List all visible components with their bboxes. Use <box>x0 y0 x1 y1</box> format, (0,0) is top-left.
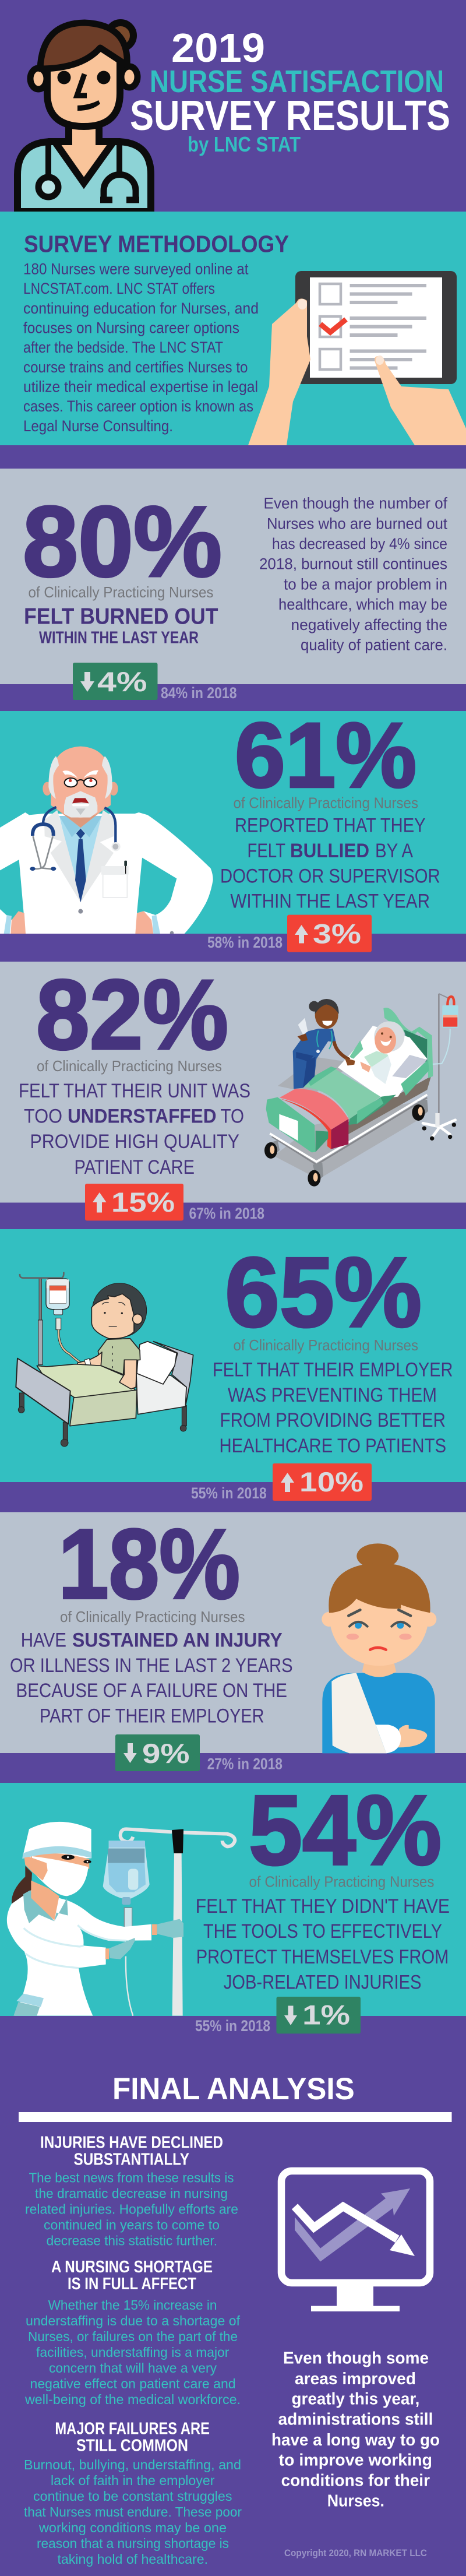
finding: understaffed: PROVIDE HIGH QUALITY <box>30 1131 239 1153</box>
finding: felt burned out: FELT BURNED OUT <box>24 604 218 629</box>
finding: understaffed: TO <box>220 1106 244 1128</box>
callout: closing statement: Nurses. <box>327 2492 384 2511</box>
finding: reported bullied: REPORTED THAT THEY <box>235 815 426 837</box>
label: of clinically practicing nurses: of Clinically Practicing Nurses <box>37 1057 222 1075</box>
text block: burnout commentary: negatively affecting the <box>291 616 447 634</box>
rule under heading <box>19 2112 452 2122</box>
finding: understaffed: UNDERSTAFFED <box>68 1106 217 1128</box>
text block: major failures: Burnout, bullying, understaffing, and <box>24 2457 241 2472</box>
text block: major failures: working conditions may be one <box>38 2520 227 2535</box>
finding: sustained an injury <box>10 1629 292 1727</box>
badge: up 10%: 10% <box>299 1466 363 1497</box>
illustration: injured nurse with sling <box>322 1543 436 1753</box>
note: 55% in 2018: 55% in 2018 <box>191 1484 267 1502</box>
icon: hands holding tablet checklist <box>248 271 466 445</box>
text block: nursing shortage: Nurses, or failures on the part of the <box>28 2329 238 2344</box>
statistic: 18%: 18% <box>58 1509 240 1620</box>
badge: down 9%: 9% <box>142 1738 190 1769</box>
finding: reported bullied: BY A <box>375 840 413 862</box>
subheading: injuries declined: SUBSTANTIALLY <box>73 2150 189 2169</box>
text block: methodology: utilize their medical expertise in legal <box>23 378 258 395</box>
finding: understaffed: FELT THAT THEIR UNIT WAS <box>19 1080 250 1102</box>
text block: burnout commentary: to be a major problem in <box>284 575 447 593</box>
panel: header <box>17 23 450 212</box>
subtitle: by LNC STAT: by LNC STAT <box>188 132 301 156</box>
finding: reported bullied <box>220 815 440 913</box>
illustration: patient in bed with IV <box>16 1272 193 1447</box>
text block: burnout commentary: healthcare, which may be <box>278 596 447 613</box>
text block: major failures: lack of faith in the employer <box>51 2473 215 2488</box>
badge: down 4%: 4% <box>97 666 147 697</box>
text block: burnout commentary: has decreased by 4% since <box>272 535 447 552</box>
statistic: 61%: 61% <box>235 704 416 807</box>
text block: injuries declined <box>25 2170 238 2248</box>
text block: burnout commentary: quality of patient care. <box>301 636 447 654</box>
illustration: nurse with patient in bed <box>264 994 458 1187</box>
note: 55% in 2018: 55% in 2018 <box>195 2017 270 2035</box>
statistic: 82%: 82% <box>36 959 228 1070</box>
text block: methodology: focuses on Nursing career options <box>23 319 239 336</box>
statistic: 80%: 80% <box>23 486 222 598</box>
panel: sustained injury <box>0 1509 466 1783</box>
badge: up 15% <box>85 1184 183 1220</box>
text block: methodology: cases. This career option is known as <box>23 397 253 415</box>
finding: sustained an injury: PART OF THEIR EMPLOYER <box>40 1705 264 1727</box>
text block: burnout commentary: 2018, burnout still continues <box>259 555 447 573</box>
panel: employer preventing care <box>0 1229 466 1512</box>
text block: major failures <box>24 2457 242 2567</box>
text block: injuries declined: continued in years to come to <box>44 2217 220 2232</box>
panel: felt burned out <box>0 469 466 711</box>
heading: final analysis: FINAL ANALYSIS <box>112 2072 355 2106</box>
badge: up 15%: 15% <box>111 1187 175 1217</box>
text block: major failures: reason that a nursing shortage is <box>37 2536 229 2551</box>
finding: sustained an injury: OR ILLNESS IN THE LAST 2 YEARS <box>10 1655 292 1677</box>
callout: closing statement <box>271 2349 440 2511</box>
text block: major failures: continue to be constant struggles <box>33 2489 232 2504</box>
title: 2019: 2019 <box>171 25 265 71</box>
text block: nursing shortage: concern that will have a very <box>49 2360 217 2376</box>
text block: injuries declined: decrease this statistic further. <box>47 2233 217 2248</box>
finding: sustained an injury: SUSTAINED AN INJURY <box>72 1629 283 1651</box>
statistic: 54%: 54% <box>249 1775 442 1886</box>
text block: burnout commentary: Even though the number of <box>263 495 448 512</box>
panel: no tools to protect <box>0 1775 466 2035</box>
text block: major failures: that Nurses must endure. These poor <box>24 2504 242 2519</box>
text block: methodology: after the bedside. The LNC STAT <box>23 339 223 356</box>
text block: nursing shortage: understaffing is due to a shortage of <box>26 2313 241 2328</box>
callout: closing statement: areas improved <box>295 2370 416 2388</box>
text block: methodology <box>23 260 259 435</box>
badge: up 10% <box>273 1463 372 1501</box>
panel: understaffed <box>0 959 466 1229</box>
text block: injuries declined: the dramatic decrease in nursing <box>35 2186 228 2201</box>
label: of clinically practicing nurses: of Clinically Practicing Nurses <box>233 1336 418 1354</box>
text block: injuries declined: The best news from these results is <box>29 2170 234 2185</box>
text block: major failures: taking hold of healthcare. <box>57 2552 208 2567</box>
label: of clinically practicing nurses: of Clinically Practicing Nurses <box>233 794 418 811</box>
text block: methodology: continuing education for Nurses, and <box>23 300 259 317</box>
finding: within the last year: WITHIN THE LAST YEAR <box>39 628 199 647</box>
badge: up 3% <box>287 915 372 952</box>
subheading: major failures: MAJOR FAILURES ARE <box>55 2420 210 2438</box>
finding: employer preventing care: WAS PREVENTING THEM <box>228 1384 437 1406</box>
statistic: 65%: 65% <box>225 1237 422 1348</box>
panel: survey methodology <box>0 212 466 445</box>
callout: closing statement: conditions for their <box>281 2471 430 2490</box>
finding: reported bullied: BULLIED <box>290 840 369 862</box>
heading: survey methodology: SURVEY METHODOLOGY <box>24 231 289 258</box>
icon: monitor with trend arrows <box>281 2171 430 2311</box>
illustration: masked nurse with IV bag <box>7 1822 235 2016</box>
note: 67% in 2018: 67% in 2018 <box>189 1205 264 1222</box>
copyright: Copyright 2020, RN MARKET LLC <box>284 2547 427 2559</box>
finding: understaffed: PATIENT CARE <box>75 1156 195 1178</box>
label: of clinically practicing nurses: of Clinically Practicing Nurses <box>60 1608 245 1625</box>
subheading: injuries declined <box>40 2134 223 2169</box>
callout: closing statement: administrations still <box>278 2410 433 2429</box>
text block: methodology: Legal Nurse Consulting. <box>23 417 173 435</box>
finding: reported bullied: WITHIN THE LAST YEAR <box>230 891 430 913</box>
finding: lacked protective tools <box>196 1895 450 1993</box>
note: 84% in 2018: 84% in 2018 <box>161 684 236 702</box>
text block: nursing shortage: negative effect on patient care and <box>30 2376 236 2391</box>
icon: nurse with stethoscope <box>17 23 151 212</box>
illustration: angry doctor <box>0 747 213 935</box>
badge: down 9% <box>115 1734 200 1771</box>
badge: down 4% <box>73 663 157 700</box>
subheading: injuries declined: INJURIES HAVE DECLINED <box>40 2134 223 2152</box>
label: of clinically practicing nurses: of Clinically Practicing Nurses <box>28 583 213 601</box>
text block: methodology: course trains and certifies Nurses to <box>23 358 248 376</box>
subheading: major failures <box>55 2420 210 2455</box>
text block: burnout commentary: Nurses who are burned out <box>267 515 448 532</box>
badge: up 3%: 3% <box>313 919 361 949</box>
callout: closing statement: greatly this year, <box>291 2390 419 2409</box>
finding: sustained an injury: HAVE <box>21 1629 66 1651</box>
finding: reported bullied: FELT <box>247 840 285 862</box>
label: of clinically practicing nurses: of Clinically Practicing Nurses <box>249 1873 434 1890</box>
subheading: major failures: STILL COMMON <box>76 2436 188 2455</box>
callout: closing statement: Even though some <box>283 2349 429 2367</box>
note: 27% in 2018: 27% in 2018 <box>207 1755 283 1773</box>
text block: nursing shortage: Whether the 15% increase in <box>48 2297 217 2313</box>
finding: employer preventing care <box>213 1359 453 1457</box>
badge: down 1%: 1% <box>302 2000 350 2030</box>
finding: understaffed: TOO <box>24 1106 62 1128</box>
subheading: nursing shortage: IS IN FULL AFFECT <box>68 2275 196 2293</box>
subheading: nursing shortage: A NURSING SHORTAGE <box>51 2258 213 2276</box>
callout: closing statement: have a long way to go <box>271 2431 440 2450</box>
finding: sustained an injury: BECAUSE OF A FAILURE ON THE <box>16 1680 287 1702</box>
finding: lacked protective tools: JOB-RELATED INJURIES <box>224 1971 422 1993</box>
finding: understaffed <box>19 1080 250 1178</box>
text block: nursing shortage <box>24 2297 241 2407</box>
text block: injuries declined: related injuries. Hopefully efforts are <box>25 2201 238 2216</box>
text block: methodology: LNCSTAT.com. LNC STAT offers <box>23 280 215 297</box>
text block: methodology: 180 Nurses were surveyed online at <box>23 260 249 277</box>
text block: nursing shortage: facilities, understaffing is a major <box>36 2345 230 2360</box>
callout: closing statement: to improve working <box>278 2451 432 2470</box>
text block: nursing shortage: well-being of the medical workforce. <box>24 2392 241 2407</box>
text block: burnout commentary <box>259 495 448 654</box>
panel: felt bullied <box>0 704 466 962</box>
panel: final analysis <box>19 1997 452 2567</box>
badge: down 1% <box>276 1997 361 2033</box>
subheading: nursing shortage <box>51 2258 213 2293</box>
note: 58% in 2018: 58% in 2018 <box>207 934 283 951</box>
